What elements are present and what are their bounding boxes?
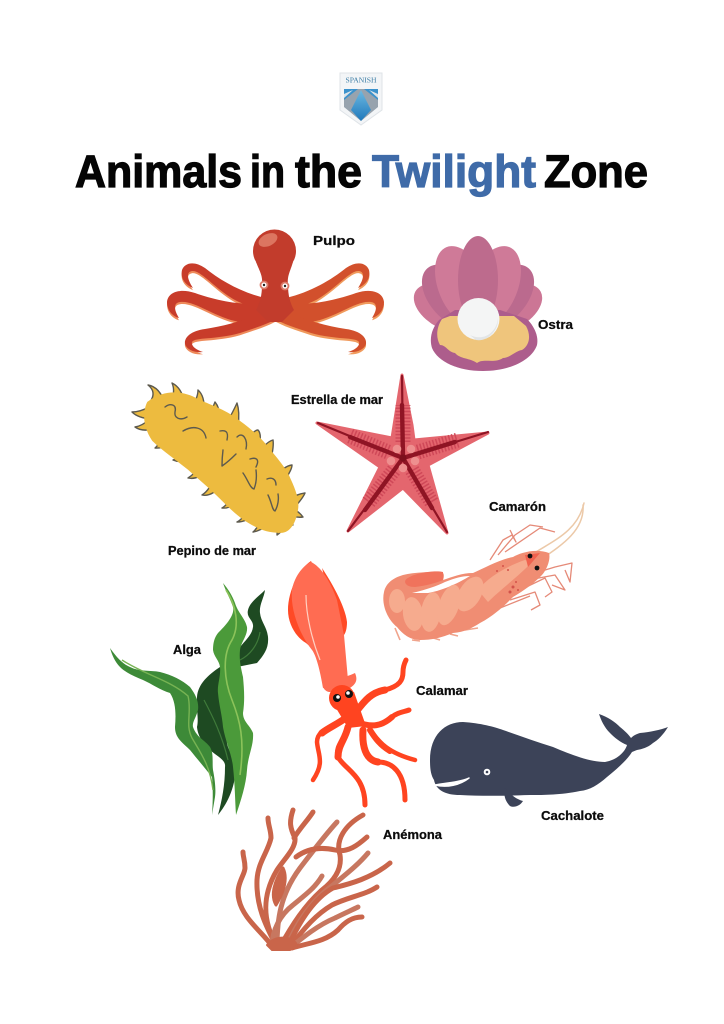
icon: octopus xyxy=(167,230,384,354)
label: Ostra: Ostra xyxy=(538,318,574,332)
label: Alga: Alga xyxy=(173,643,202,657)
logo: SPANISH xyxy=(346,76,377,84)
icon: sperm whale xyxy=(430,714,668,807)
label: Cachalote: Cachalote xyxy=(541,809,604,823)
icon: shrimp xyxy=(383,503,584,641)
icon: anemone xyxy=(238,810,390,950)
title: in xyxy=(250,146,285,197)
title: Twilight xyxy=(372,146,536,197)
icon: squid xyxy=(288,561,415,805)
icon: oyster with pearl xyxy=(405,236,551,371)
title: Zone xyxy=(544,146,648,197)
label: Calamar: Calamar xyxy=(416,684,468,698)
label: Pulpo: Pulpo xyxy=(313,234,355,248)
title: the xyxy=(295,146,362,197)
logo xyxy=(340,73,382,125)
icon: starfish xyxy=(317,375,488,533)
title: Animals xyxy=(75,146,242,197)
icon: sea cucumber xyxy=(132,383,305,535)
sea cucumber body xyxy=(144,392,298,533)
label: Pepino de mar: Pepino de mar xyxy=(168,544,256,558)
icon: seaweed xyxy=(110,583,268,815)
label: Anémona: Anémona xyxy=(383,828,443,842)
label: Estrella de mar: Estrella de mar xyxy=(291,393,383,407)
title xyxy=(75,146,648,197)
label: Camarón: Camarón xyxy=(489,500,546,514)
